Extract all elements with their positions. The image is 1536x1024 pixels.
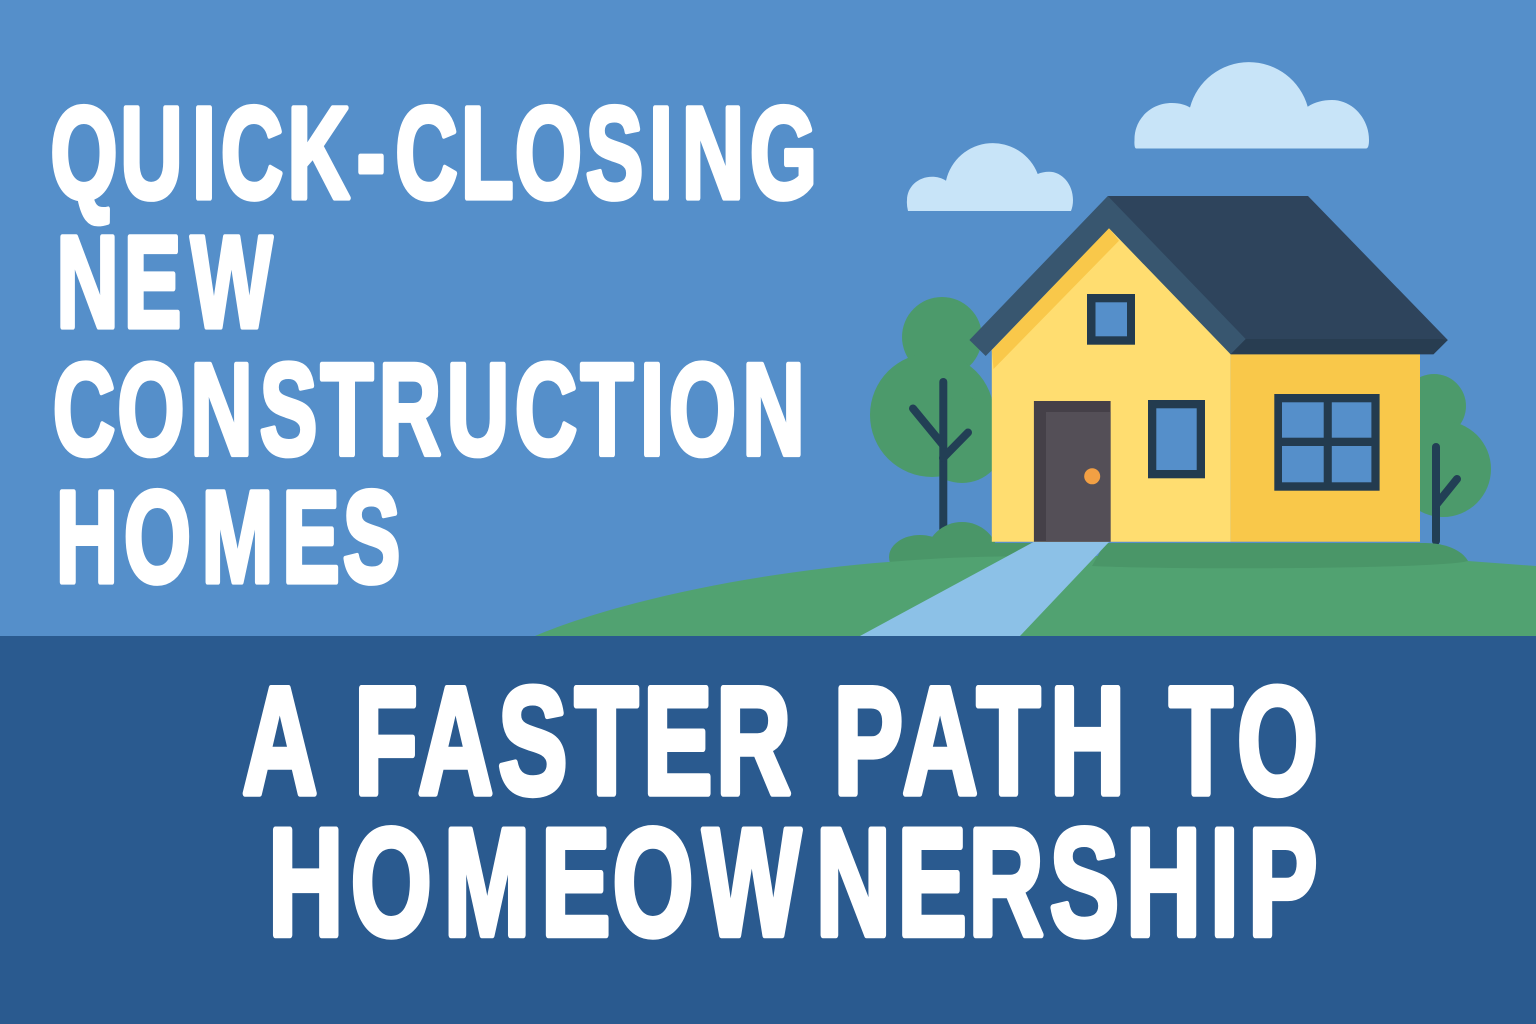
bush: left xyxy=(889,522,1035,590)
tree: left xyxy=(870,297,1005,535)
tree: right xyxy=(1395,374,1491,541)
ground hill xyxy=(535,556,1536,636)
ground shadow: right of path xyxy=(1092,543,1468,568)
subtitle: a faster path to homeownership xyxy=(242,656,1318,968)
title: quick-closing new construction homes: CONSTRUCTION xyxy=(53,336,805,483)
title: quick-closing new construction homes: QUICK-CLOSING xyxy=(50,80,817,226)
tree foliage xyxy=(1395,374,1491,517)
wall shade under gable xyxy=(992,228,1119,369)
subtitle: a faster path to homeownership: HOMEOWNERSHIP xyxy=(268,797,1317,968)
roof: main dark xyxy=(1108,196,1448,354)
door xyxy=(1034,401,1111,542)
tree foliage xyxy=(870,297,1005,483)
wall: right side xyxy=(1231,354,1420,542)
window: attic xyxy=(1087,294,1135,345)
door knob xyxy=(1084,468,1100,484)
title: quick-closing new construction homes: NEW xyxy=(56,209,273,355)
house xyxy=(969,196,1448,542)
sky background xyxy=(0,0,1536,636)
tree trunk and branch xyxy=(1436,447,1457,541)
window: middle xyxy=(1148,400,1205,478)
title: quick-closing new construction homes xyxy=(50,80,817,610)
window: right xyxy=(1274,394,1380,491)
cloud: small xyxy=(907,143,1073,211)
cloud: large xyxy=(1134,62,1369,148)
tree trunk and branches xyxy=(913,382,968,535)
walkway xyxy=(860,542,1109,636)
subtitle: a faster path to homeownership: A FASTER PATH TO xyxy=(242,656,1318,826)
wall: left front xyxy=(992,228,1231,542)
roof: eave xyxy=(1231,339,1448,354)
bottom band xyxy=(0,636,1536,1024)
title: quick-closing new construction homes: HOMES xyxy=(56,464,400,610)
roof: gable trim xyxy=(969,196,1246,356)
